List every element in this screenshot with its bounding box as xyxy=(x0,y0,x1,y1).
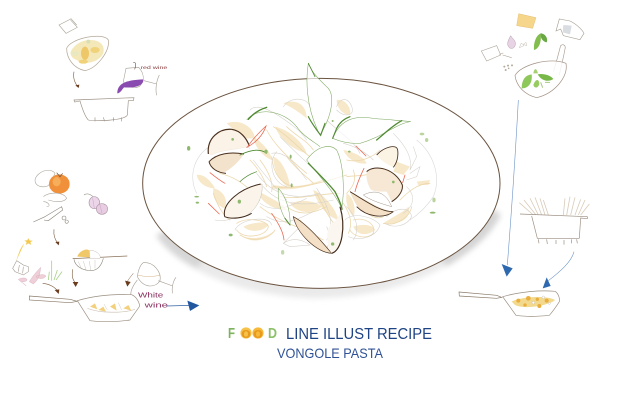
icon: cheese xyxy=(517,14,536,28)
icon: mortar bowl with basil xyxy=(515,61,566,98)
icon: onions xyxy=(84,194,108,214)
title line two: VONGOLE PASTA xyxy=(277,345,384,361)
blue arrowhead xyxy=(502,264,513,277)
pasta outlines xyxy=(212,99,420,248)
inner plate well xyxy=(193,140,437,220)
icon: packet xyxy=(59,18,77,33)
clam: upper left xyxy=(208,129,249,173)
title line one: LINE ILLUST RECIPE xyxy=(286,326,432,343)
step: spaghetti in pot and final pan xyxy=(459,100,589,316)
red chili pieces xyxy=(208,126,405,240)
icon: strainer with garlic xyxy=(73,249,127,271)
clam: right xyxy=(350,168,402,216)
icon: red wine glass xyxy=(117,63,159,95)
icon: frying pan xyxy=(29,295,139,322)
icon: oil bottle xyxy=(556,19,584,40)
step: pasta bowl, red wine and pot xyxy=(59,18,168,121)
icon: herb sprigs xyxy=(48,261,62,281)
peppercorns xyxy=(503,64,513,71)
icon: pot xyxy=(74,98,134,121)
arrowhead xyxy=(75,85,79,88)
label: red wine: red wine xyxy=(141,65,168,71)
icon: garlic pieces xyxy=(13,261,28,275)
icon: garlic xyxy=(508,36,515,48)
pasta strands xyxy=(213,127,430,240)
label: white wine: wine xyxy=(143,303,168,310)
arrowhead xyxy=(125,281,131,287)
plate illustration xyxy=(143,63,501,298)
arrowhead xyxy=(73,282,78,287)
icon: pasta bowl xyxy=(67,36,108,71)
blue arrow line xyxy=(548,252,574,281)
arrow xyxy=(43,283,58,292)
basil dark veins xyxy=(240,63,402,225)
icon: pestle xyxy=(553,45,565,75)
arrowhead xyxy=(187,301,199,311)
arrow xyxy=(127,273,133,282)
icon: spaghetti strands xyxy=(519,197,589,215)
arrow xyxy=(74,72,78,87)
arrow xyxy=(54,229,58,243)
icon: white wine glass xyxy=(131,263,176,295)
step: pesto ingredients and bowl xyxy=(481,14,584,98)
icon: sliced shallots xyxy=(18,267,46,286)
plate rim xyxy=(143,78,500,288)
icon: garlic cloves xyxy=(519,42,527,48)
icon: final pan with pasta xyxy=(459,291,559,316)
arrowhead xyxy=(55,289,59,294)
icon: salt jar xyxy=(481,46,512,61)
blue arrow line xyxy=(507,100,518,265)
title word: Food: D xyxy=(268,325,277,342)
title word: Food: o xyxy=(241,325,251,342)
title word: Food: F xyxy=(228,325,235,342)
icon: tomato xyxy=(35,170,70,207)
label: white wine xyxy=(138,292,168,310)
bottle liquid xyxy=(563,25,572,34)
basil leaves xyxy=(247,63,411,225)
herb flecks xyxy=(187,120,436,255)
arrow xyxy=(167,304,190,307)
step: tomato, onion, herbs and pan xyxy=(13,170,199,322)
clam: left xyxy=(224,184,262,218)
clam: bottom centre xyxy=(293,207,343,253)
icon: pasta pot xyxy=(520,214,587,245)
icon: knife xyxy=(33,207,68,223)
clam: small right xyxy=(377,147,398,167)
label: white wine: White xyxy=(138,292,163,299)
arrow xyxy=(72,269,75,283)
plate shadow xyxy=(156,207,501,298)
title word: Food xyxy=(228,325,277,342)
pasta colour fills xyxy=(197,100,430,240)
arrowhead xyxy=(55,242,59,245)
title xyxy=(228,325,432,361)
title word: Food: o xyxy=(253,325,263,342)
icon: falling basil xyxy=(534,33,547,50)
blue arrowhead xyxy=(543,277,551,288)
icon: chili flower xyxy=(17,238,32,260)
